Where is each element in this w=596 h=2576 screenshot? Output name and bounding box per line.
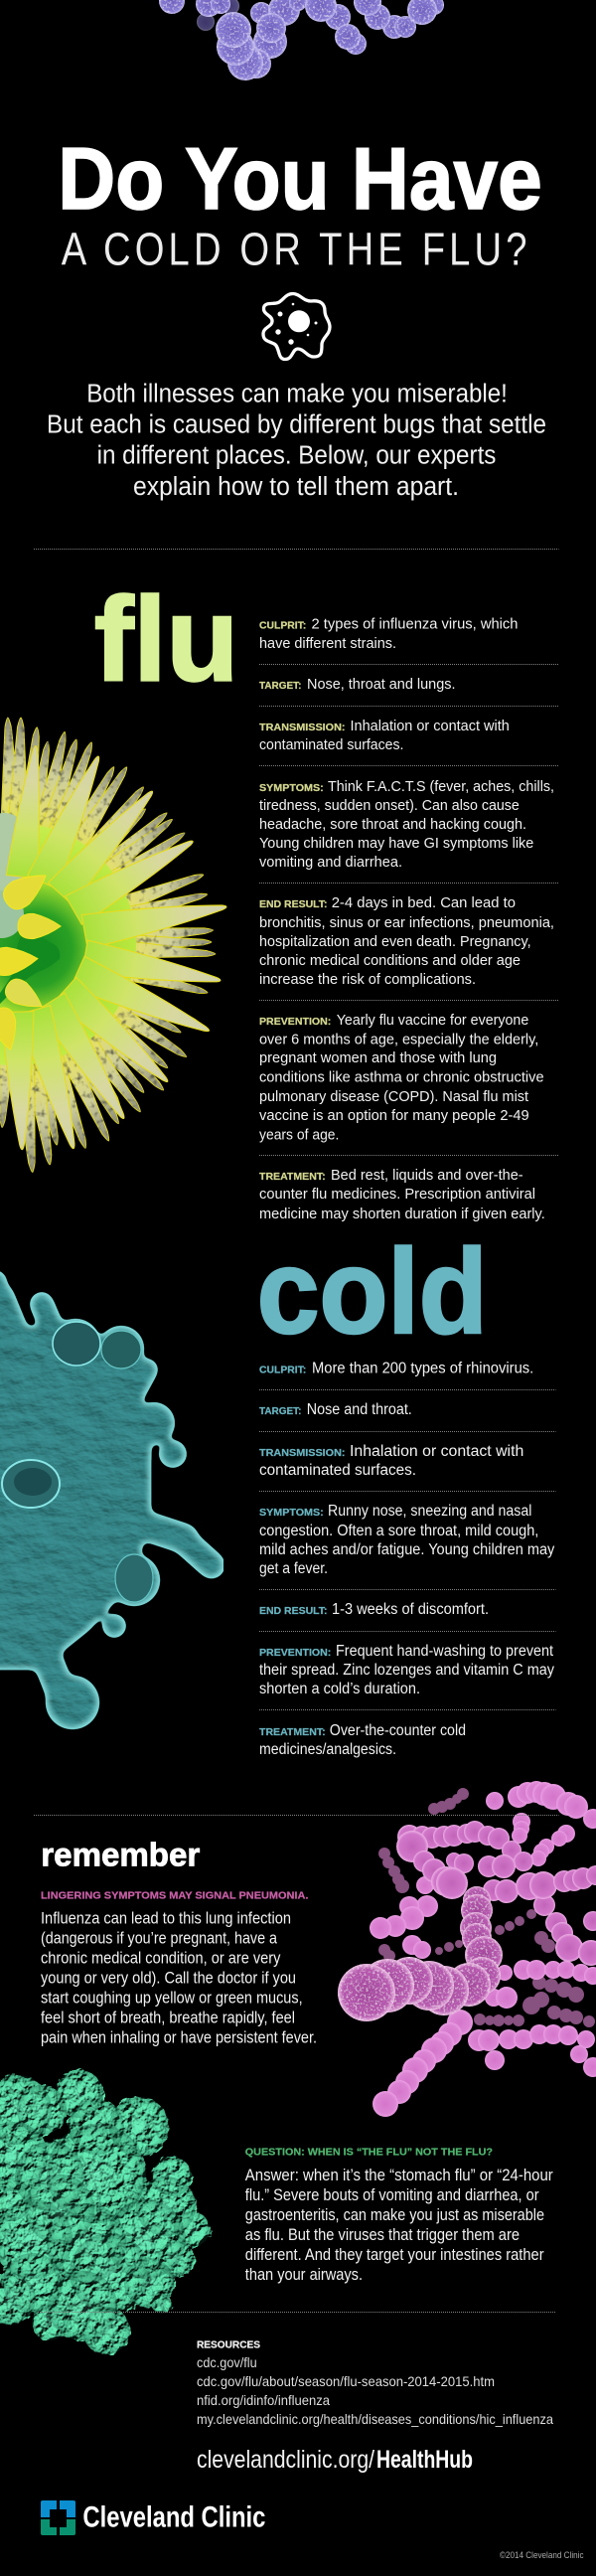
flu symptoms: tiredness, sudden onset). Can also cause	[259, 797, 520, 814]
cold transmission	[259, 1443, 523, 1479]
answer text: gastroenteritis, can make you just as miserable	[245, 2205, 544, 2224]
cold target: TARGET:	[259, 1405, 302, 1417]
cold end result: 1-3 weeks of discomfort.	[332, 1601, 489, 1618]
flu prevention	[259, 1012, 544, 1143]
cold target: Nose and throat.	[307, 1401, 412, 1418]
illustration: pink bacteria	[338, 1781, 596, 2117]
cold culprit: More than 200 types of rhinovirus.	[312, 1361, 533, 1377]
flu prevention: Yearly flu vaccine for everyone	[337, 1012, 528, 1029]
flu end result: chronic medical conditions and older age	[259, 952, 521, 969]
cold prevention: their spread. Zinc lozenges and vitamin C may	[259, 1662, 554, 1679]
illustration: green virus	[0, 2070, 210, 2354]
flu symptoms: SYMPTOMS:	[259, 782, 324, 794]
cold treatment: Over-the-counter cold	[330, 1722, 466, 1739]
illustration: flu virus	[0, 718, 229, 1173]
flu target: TARGET:	[259, 680, 302, 692]
pneumonia subheading: LINGERING SYMPTOMS MAY SIGNAL PNEUMONIA.	[41, 1890, 308, 1902]
panel: resources	[197, 2339, 553, 2427]
cold prevention: Frequent hand-washing to prevent	[336, 1643, 554, 1660]
resource links: cdc.gov/flu	[197, 2354, 257, 2370]
logo: Cleveland Clinic	[41, 2500, 265, 2535]
flu prevention: PREVENTION:	[259, 1016, 331, 1028]
heading: cold: cold	[257, 1223, 488, 1359]
pneumonia text: start coughing up yellow or green mucus,	[41, 1989, 303, 2008]
heading: flu: flu	[94, 572, 238, 706]
answer text: than your airways.	[245, 2265, 363, 2284]
cold transmission: contaminated surfaces.	[259, 1462, 416, 1479]
panel: remember	[41, 1836, 317, 2047]
copyright: ©2014 Cleveland Clinic	[500, 2550, 584, 2561]
cold target	[259, 1401, 412, 1418]
flu culprit: have different strains.	[259, 635, 396, 652]
cold symptoms: SYMPTOMS:	[259, 1507, 324, 1519]
flu symptoms: headache, sore throat and hacking cough.	[259, 816, 526, 833]
cold prevention	[259, 1643, 554, 1697]
cold treatment: TREATMENT:	[259, 1726, 326, 1738]
flu transmission: contaminated surfaces.	[259, 736, 403, 753]
cold symptoms: get a fever.	[259, 1560, 328, 1577]
cold treatment	[259, 1722, 466, 1758]
intro text: Both illnesses can make you miserable!	[86, 381, 508, 408]
flu symptoms: Think F.A.C.T.S (fever, aches, chills,	[328, 778, 554, 795]
flu culprit: 2 types of influenza virus, which	[312, 616, 519, 632]
website link: HealthHub	[376, 2446, 473, 2474]
cold transmission: Inhalation or contact with	[350, 1443, 523, 1460]
flu end result	[259, 894, 554, 988]
answer text: Answer: when it’s the “stomach flu” or “24-hour	[245, 2166, 553, 2184]
flu end result: END RESULT:	[259, 898, 328, 910]
answer text	[245, 2166, 553, 2284]
flu end result: increase the risk of complications.	[259, 971, 476, 988]
flu prevention: pulmonary disease (COPD). Nasal flu mist	[259, 1088, 529, 1105]
flu symptoms	[259, 778, 554, 871]
cold treatment: medicines/analgesics.	[259, 1741, 396, 1758]
flu target: Nose, throat and lungs.	[307, 676, 455, 693]
cold symptoms	[259, 1503, 555, 1577]
flu transmission	[259, 718, 510, 753]
cold culprit: CULPRIT:	[259, 1365, 306, 1376]
pneumonia text: Influenza can lead to this lung infection	[41, 1909, 291, 1928]
flu prevention: vaccine is an option for many people 2-49	[259, 1107, 529, 1124]
website link: clevelandclinic.org/	[197, 2446, 374, 2474]
panel: flu facts	[259, 616, 558, 1222]
cold symptoms: Runny nose, sneezing and nasal	[328, 1503, 531, 1520]
question heading: QUESTION: WHEN IS “THE FLU” NOT THE FLU?	[245, 2147, 493, 2159]
intro text: But each is caused by different bugs that settle	[47, 411, 546, 439]
flu transmission: TRANSMISSION:	[259, 722, 346, 733]
answer text: different. And they target your intestines rather	[245, 2245, 544, 2264]
flu treatment: medicine may shorten duration if given early.	[259, 1206, 545, 1222]
pneumonia text: pain when inhaling or have persistent fever.	[41, 2028, 317, 2047]
cold symptoms: congestion. Often a sore throat, mild cough,	[259, 1523, 538, 1539]
flu end result: 2-4 days in bed. Can lead to	[332, 894, 516, 911]
flu transmission: Inhalation or contact with	[350, 718, 510, 734]
flu end result: bronchitis, sinus or ear infections, pneumonia,	[259, 914, 554, 931]
flu treatment: Bed rest, liquids and over-the-	[331, 1167, 523, 1184]
cold end result	[259, 1601, 489, 1618]
cold transmission: TRANSMISSION:	[259, 1447, 346, 1459]
cold prevention: shorten a cold’s duration.	[259, 1681, 420, 1697]
intro text: in different places. Below, our experts	[97, 442, 496, 470]
resource links: my.clevelandclinic.org/health/diseases_conditions/hic_influenza	[197, 2411, 553, 2427]
resource links	[197, 2354, 553, 2427]
icon: germ	[263, 294, 330, 360]
pneumonia text: feel short of breath, breathe rapidly, feel	[41, 2009, 295, 2027]
flu prevention: years of age.	[259, 1126, 339, 1143]
resource links: nfid.org/idinfo/influenza	[197, 2392, 330, 2408]
flu culprit	[259, 616, 519, 652]
pneumonia text: (dangerous if you’re pregnant, have a	[41, 1929, 277, 1948]
flu prevention: over 6 months of age, especially the elderly,	[259, 1031, 538, 1047]
flu treatment: TREATMENT:	[259, 1171, 326, 1183]
flu treatment: counter flu medicines. Prescription antiviral	[259, 1186, 535, 1203]
panel: cold facts	[259, 1361, 556, 1758]
cold symptoms: mild aches and/or fatigue. Young children may	[259, 1541, 555, 1558]
flu prevention: conditions like asthma or chronic obstructive	[259, 1069, 544, 1086]
flu treatment	[259, 1167, 545, 1222]
intro text	[47, 381, 546, 501]
pneumonia text: chronic medical condition, or are very	[41, 1949, 281, 1968]
cold prevention: PREVENTION:	[259, 1647, 331, 1659]
resources heading: RESOURCES	[197, 2339, 260, 2351]
flu end result: hospitalization and even death. Pregnancy,	[259, 933, 531, 950]
heading: remember: remember	[41, 1836, 200, 1872]
flu symptoms: vomiting and diarrhea.	[259, 854, 402, 871]
answer text: flu.” Severe bouts of vomiting and diarrhea, or	[245, 2185, 539, 2204]
pneumonia text	[41, 1909, 317, 2047]
flu culprit: CULPRIT:	[259, 620, 306, 632]
flu symptoms: Young children may have GI symptoms like	[259, 835, 533, 852]
title	[58, 129, 542, 275]
intro text: explain how to tell them apart.	[133, 473, 459, 501]
panel: stomach flu question	[245, 2147, 553, 2284]
cold end result: END RESULT:	[259, 1605, 328, 1617]
pneumonia text: young or very old). Call the doctor if you	[41, 1969, 296, 1988]
logo: Cleveland Clinic: Cleveland Clinic	[82, 2501, 265, 2534]
resource links: cdc.gov/flu/about/season/flu-season-2014-2015.htm	[197, 2373, 495, 2389]
illustration: cold virus	[0, 1282, 212, 1729]
title: Do You Have	[58, 129, 542, 228]
flu prevention: pregnant women and those with lung	[259, 1049, 497, 1066]
answer text: as flu. But the viruses that trigger them are	[245, 2225, 520, 2244]
illustration: purple bacteria	[159, 0, 444, 80]
